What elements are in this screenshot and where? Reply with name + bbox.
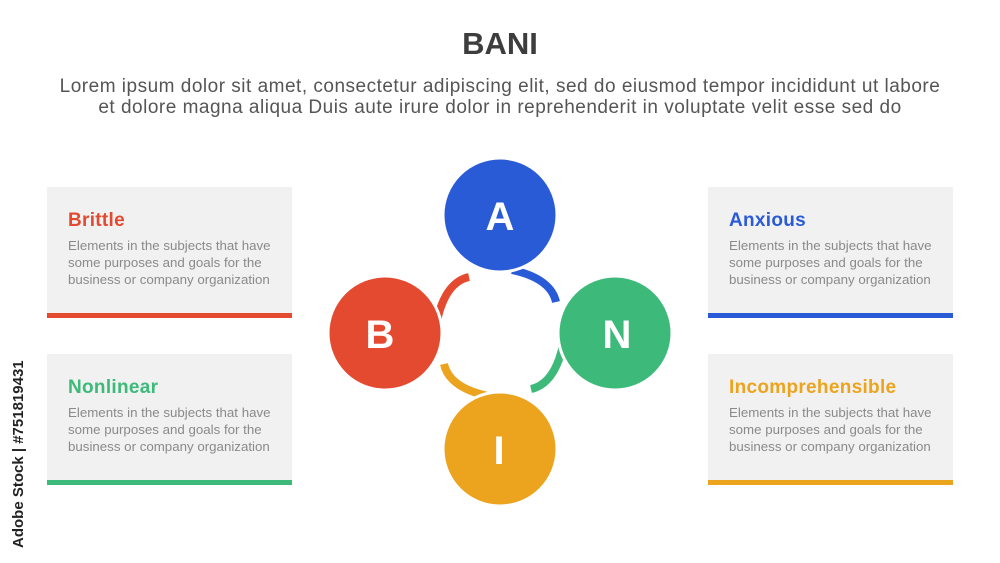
- circle N: N: [603, 313, 631, 357]
- panel: brittle: Brittle: [68, 210, 125, 231]
- panel: anxious: Anxious: [729, 210, 806, 231]
- panel: incomprehensible: Elements in the subjects that have some purposes and goals for the business or company organization: [729, 405, 932, 454]
- circle N: [558, 276, 672, 390]
- title: BANI: [462, 26, 538, 61]
- panel: incomprehensible: [708, 354, 953, 481]
- circle I: I: [493, 429, 505, 473]
- circle B: B: [366, 313, 394, 357]
- panel: anxious: Elements in the subjects that have some purposes and goals for the business or company organization: [729, 238, 932, 287]
- panel: anxious: [708, 187, 953, 314]
- subtitle: Lorem ipsum dolor sit amet, consectetur adipiscing elit, sed do eiusmod tempor incididunt ut labore: [60, 76, 940, 97]
- panel: nonlinear: [47, 354, 292, 481]
- circle A: [443, 158, 557, 272]
- panel: nonlinear: Nonlinear: [68, 377, 158, 398]
- watermark side text: Adobe Stock | #751819431: [10, 360, 27, 548]
- circle I: [443, 392, 557, 506]
- circle B: [328, 276, 442, 390]
- circle A: A: [486, 195, 514, 239]
- subtitle: [60, 76, 940, 118]
- subtitle: et dolore magna aliqua Duis aute irure dolor in reprehenderit in voluptate velit esse sed do: [98, 97, 902, 118]
- panel: incomprehensible: Incomprehensible: [729, 377, 896, 398]
- panel: nonlinear: Elements in the subjects that have some purposes and goals for the business or company organization: [68, 405, 271, 454]
- panel: brittle: Elements in the subjects that have some purposes and goals for the business or company organization: [68, 238, 271, 287]
- panel: brittle: [47, 187, 292, 314]
